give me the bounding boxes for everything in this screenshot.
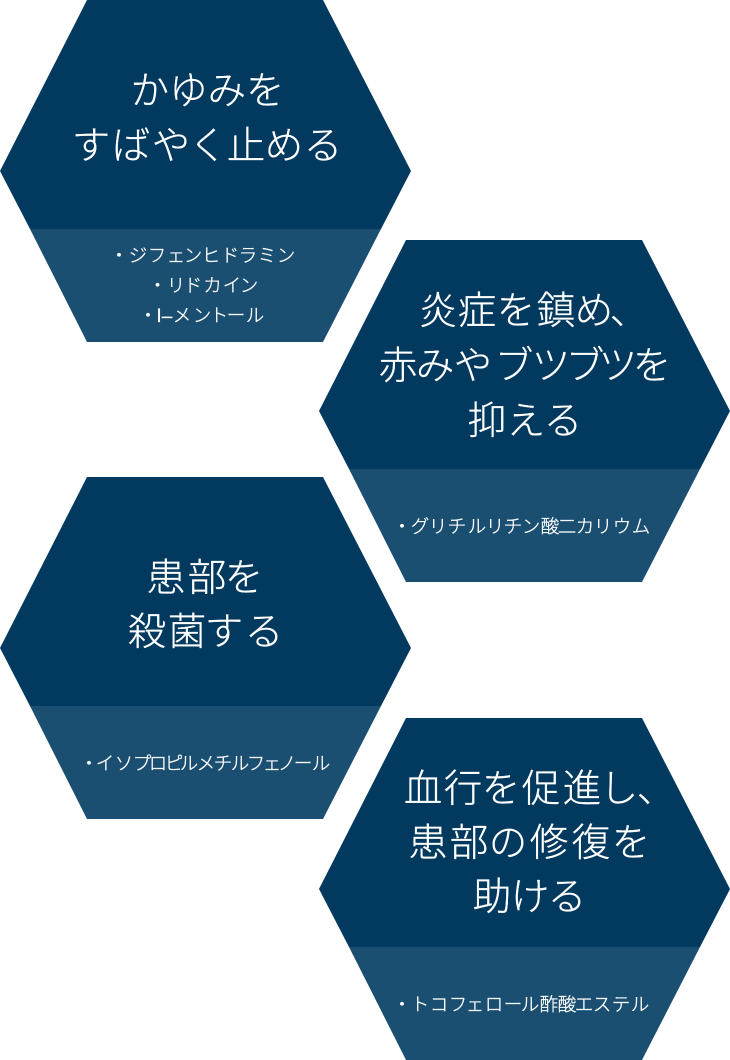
heading [404,768,675,919]
hexagon top [0,477,411,706]
panel: sterilize [0,477,411,819]
hexagon bottom [30,706,381,819]
ingredient list: ・l–メントール [139,305,264,326]
ingredient list: ・ジフェンヒドラミン [110,245,295,266]
panel: promote circulation [319,718,730,1060]
hexagon top [0,0,411,229]
panel: reduce inflammation [319,240,730,582]
hexagon top [319,240,730,469]
ingredient list: ・トコフェロール酢酸エステル [393,994,649,1015]
heading: 殺菌する [128,611,283,654]
heading: 助ける [473,876,586,919]
ingredient list: ・リドカイン [148,275,258,296]
heading: すばやく止める [72,125,342,168]
panel: stop itching [0,0,411,342]
heading: 炎症を鎮め、 [419,290,648,333]
heading: 患部の修復を [409,822,650,865]
heading: 血行を促進し、 [404,768,675,811]
ingredient list [110,245,295,326]
hexagon bottom [349,469,700,582]
heading [72,70,342,168]
heading: 患部を [147,557,263,600]
heading: 赤みやブツブツを [379,345,671,388]
heading [128,557,283,654]
ingredient list: ・イソプロピルメチルフェノール [80,753,330,774]
hexagon bottom [349,947,700,1060]
heading: 抑える [468,400,582,443]
ingredient list: ・グリチルリチン酸二カリウム [393,516,650,537]
heading [379,290,671,443]
hexagon top [319,718,730,947]
hexagon bottom [30,229,381,342]
heading: かゆみを [130,70,285,113]
